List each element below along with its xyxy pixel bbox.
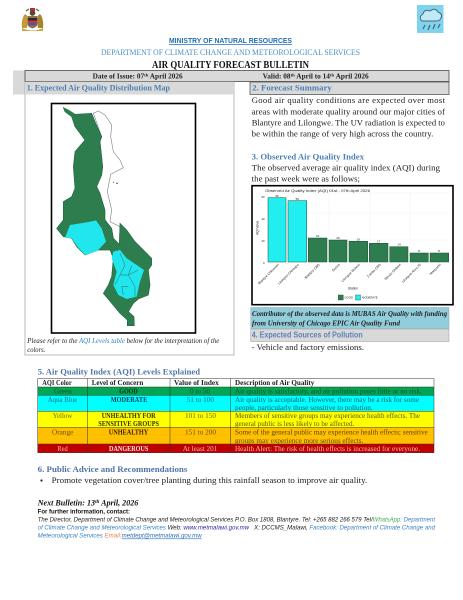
map caption: colors. <box>27 346 46 354</box>
bar chart: observed AQI by station: Observed Air Quality Index (AQI) 01st - 07th April 2026 <box>265 189 370 193</box>
bar chart: observed AQI by station: 60 <box>262 195 265 199</box>
table header: Level of Concern <box>92 378 143 387</box>
text block: contact details: For further information, contact: <box>38 510 130 516</box>
row: yellow unhealthy for sensitive groups: general public is less likely to be affected. <box>235 419 354 428</box>
row: green good: GOOD <box>119 386 138 396</box>
chart legend <box>338 295 378 300</box>
date bar: th <box>291 72 295 77</box>
text block: forecast summary: areas with moderate quality around our major cities of <box>252 106 445 116</box>
table: AQI levels <box>38 378 434 453</box>
heading: section 5 AQI levels explained: 5. Air Quality Index (AQI) Levels Explained <box>38 367 200 377</box>
bar chart: observed AQI by station: Station <box>348 286 358 290</box>
text block: pollution sources: - Vehicle and factory emissions. <box>252 342 364 352</box>
list: recommendation: Promote vegetation cover/tree planting during this rainfall season to improve air quality. <box>52 476 367 485</box>
heading: section 2 forecast summary: 2. Forecast Summary <box>252 83 332 93</box>
chart legend: MODERATE <box>362 296 378 300</box>
text block: observed intro: The observed average air quality index (AQI) during <box>252 163 441 173</box>
text block: contact details <box>38 510 436 540</box>
bar chart: observed AQI by station: 40 <box>262 217 265 221</box>
header: department name: DEPARTMENT OF CLIMATE CHANGE AND METEOROLOGICAL SERVICES <box>101 48 360 57</box>
text block: contact details: The Director, Department of Climate Change and Meteorological Services P.O. Box 1808, Blantyre. Tel: +265 882 266 579 Tel/WhatsApp: Department <box>38 518 435 524</box>
heading: section 3 observed air quality index: 3. Observed Air Quality Index <box>252 152 365 162</box>
icon: Malawi coat of arms <box>22 8 43 31</box>
row: orange unhealthy <box>52 428 428 445</box>
text: next bulletin: April, 2026 <box>99 497 139 507</box>
bar chart: observed AQI by station: 20 <box>262 239 265 243</box>
bar value labels: 20 <box>336 236 340 240</box>
date bar: th <box>144 72 149 77</box>
station labels: Lilongwe Chinsapo <box>277 263 300 285</box>
heading: section 1: 1. Expected Air Quality Distribution Map <box>27 83 170 93</box>
station labels: Mangochi <box>429 263 442 276</box>
date bar: Date of Issue: 07 <box>93 73 141 80</box>
row: orange unhealthy: groups may experience more serious effects. <box>235 436 363 445</box>
text block: contact details: Meteorological Services Email:metdept@metmalawi.gov.mw <box>38 534 202 540</box>
station labels: Blantyre CBD <box>304 262 321 280</box>
bar value labels: 19 <box>357 237 360 241</box>
bar chart: observed AQI by station: AQI Value <box>256 220 260 235</box>
row: orange unhealthy: Some of the general public may experience health effects; sensitive <box>235 428 428 436</box>
header: ministry name: MINISTRY OF NATURAL RESOURCES <box>169 36 292 45</box>
row: yellow unhealthy for sensitive groups: 101 to 150 <box>185 411 216 420</box>
map caption <box>26 337 219 354</box>
row: aqua moderate <box>48 395 420 412</box>
date bar: th <box>330 72 335 77</box>
station labels: Zomba CBD <box>366 262 382 279</box>
row: green good <box>54 386 422 396</box>
row: orange unhealthy: 151 to 200 <box>185 428 216 436</box>
row: aqua moderate: 51 to 100 <box>187 395 214 404</box>
bar value labels: 8 <box>418 249 420 253</box>
date bar: April to 14 <box>295 73 331 80</box>
bar value labels: 14 <box>397 243 401 247</box>
table header: Value of Index <box>174 378 219 387</box>
bars <box>268 198 449 262</box>
bar value labels <box>275 194 440 253</box>
heading: section 2 forecast summary <box>250 82 449 94</box>
row: orange unhealthy: UNHEALTHY <box>109 428 149 436</box>
row: red dangerous: At least 201 <box>183 444 218 453</box>
panel: expected air quality distribution map <box>25 82 234 355</box>
row: yellow unhealthy for sensitive groups: Yellow <box>53 411 73 420</box>
row: red dangerous <box>57 444 420 453</box>
station labels: Lilongwe Mchesi <box>341 263 361 283</box>
heading: section 4 expected sources of pollution: 4. Expected Sources of Pollution <box>252 330 363 339</box>
date bar: April 2026 <box>148 73 183 80</box>
bar value labels: 8 <box>438 249 440 253</box>
date bar: April 2026 <box>334 73 369 80</box>
station labels <box>257 262 442 285</box>
bar chart: observed AQI by station: 0 <box>263 261 265 265</box>
station labels: Mzuzu Chibavi <box>384 263 402 281</box>
text block: observed intro: the past week were as follows; <box>252 174 360 184</box>
row: red dangerous: Health Alert: The risk of health effects is increased for everyone. <box>235 444 420 453</box>
table header: AQI Color <box>42 378 72 387</box>
bar value labels: 22 <box>316 234 320 238</box>
row: yellow unhealthy for sensitive groups: UNHEALTHY FOR <box>102 411 156 420</box>
title: AIR QUALITY FORECAST BULLETIN <box>152 60 310 71</box>
row: green good: 0 to 50 <box>190 386 210 396</box>
text block: observed intro <box>252 163 441 184</box>
text block: contact details: of Climate Change and Meteorological Services Web: www.metmalawi.gov.mw X: DCCMS_Malawi, Facebook: Department of Climate Change and <box>38 526 436 532</box>
table header <box>42 378 315 387</box>
text block: forecast summary: Good air quality conditions are expected over most <box>252 95 446 105</box>
bar chart: observed AQI by station <box>252 186 453 305</box>
icon: rain cloud <box>417 5 444 33</box>
row: yellow unhealthy for sensitive groups <box>53 411 421 428</box>
callout: data contributor: from University of Chicago EPIC Air Quality Fund <box>252 318 400 327</box>
map of Malawi <box>52 104 196 333</box>
text: next bulletin: th <box>95 499 99 505</box>
row: aqua moderate: Air quality is acceptable. However, there may be a risk for some <box>235 395 420 404</box>
heading: section 1 <box>25 82 234 94</box>
chart legend: GOOD <box>344 296 353 300</box>
row: yellow unhealthy for sensitive groups: Members of sensitive groups may experience health effects. The <box>235 411 421 420</box>
map caption: Please refer to the AQI Levels table below for the interpretation of the <box>26 337 219 345</box>
heading: section 4 expected sources of pollution <box>251 329 449 342</box>
row: aqua moderate: people, particularly those sensitive to pollution. <box>235 403 373 412</box>
row: aqua moderate: MODERATE <box>111 395 147 404</box>
callout: data contributor <box>251 308 449 328</box>
text block: forecast summary <box>252 95 446 139</box>
row: green good: Green <box>54 386 72 396</box>
date bar <box>13 70 449 94</box>
row: red dangerous: DANGEROUS <box>109 444 148 453</box>
bar value labels: 59 <box>275 194 279 198</box>
row: aqua moderate: Aqua Blue <box>48 395 78 404</box>
text: next bulletin: Next Bulletin: 13 <box>38 497 99 507</box>
row: green good: Air quality is satisfactory, and air pollution poses little or no risk. <box>235 386 422 396</box>
row: yellow unhealthy for sensitive groups: SENSITIVE GROUPS <box>98 419 159 428</box>
text block: forecast summary: Blantyre and Lilongwe. The UV radiation is expected to <box>252 118 445 128</box>
table header: Description of Air Quality <box>235 378 315 387</box>
station labels: Lilongwe Area 25 <box>401 263 422 284</box>
bar value labels: 56 <box>296 197 299 201</box>
row: orange unhealthy: Orange <box>52 428 74 436</box>
callout: data contributor: Contributor of the observed data is MUBAS Air Quality with funding <box>252 309 447 318</box>
heading: section 6 public advice: 6. Public Advice and Recommendations <box>38 464 188 474</box>
date bar: Valid: 08 <box>263 73 289 80</box>
bar value labels: 17 <box>377 239 381 243</box>
row: red dangerous: Red <box>57 444 68 453</box>
station labels: Blantyre Chilomoni <box>257 263 280 285</box>
station labels: Dedza <box>331 263 341 272</box>
text block: forecast summary: be within the range of very high across the country. <box>252 129 433 139</box>
